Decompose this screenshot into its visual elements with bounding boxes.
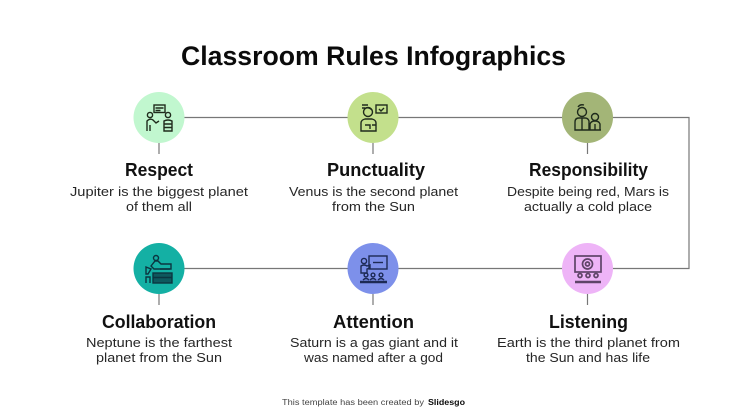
punctuality description: from the Sun	[332, 199, 415, 214]
listening circle	[562, 243, 613, 294]
step: listening	[497, 243, 680, 365]
responsibility description	[507, 184, 670, 214]
collaboration description: planet from the Sun	[96, 350, 222, 365]
step: respect	[70, 92, 248, 214]
listening description: Earth is the third planet from	[497, 335, 680, 350]
listening heading: Listening	[549, 312, 628, 332]
punctuality circle	[348, 92, 398, 143]
icon: students at desks	[146, 256, 172, 283]
respect heading: Respect	[125, 160, 193, 180]
responsibility description: Despite being red, Mars is	[507, 184, 670, 199]
icon: teacher with speech bubble	[361, 105, 387, 131]
responsibility circle	[562, 92, 613, 143]
respect description: of them all	[126, 199, 192, 214]
listening description: the Sun and has life	[526, 350, 650, 365]
attention circle	[348, 243, 398, 294]
icon: teacher at board	[360, 256, 387, 282]
footer credit	[282, 398, 465, 407]
punctuality description: Venus is the second planet	[289, 184, 458, 199]
step: collaboration	[86, 243, 232, 365]
footer credit: Slidesgo	[428, 398, 465, 407]
collaboration description	[86, 335, 232, 365]
attention heading: Attention	[333, 312, 414, 332]
step: attention	[290, 243, 458, 365]
connector line	[159, 118, 689, 305]
footer credit: This template has been created by	[282, 398, 424, 407]
collaboration circle	[134, 243, 184, 294]
step: responsibility	[507, 92, 670, 214]
responsibility heading: Responsibility	[529, 160, 648, 180]
collaboration heading: Collaboration	[102, 312, 216, 332]
attention description	[290, 335, 458, 365]
respect description: Jupiter is the biggest planet	[70, 184, 248, 199]
punctuality heading: Punctuality	[327, 160, 425, 180]
icon: audience watching screen	[575, 256, 601, 282]
step: punctuality	[289, 92, 458, 214]
listening description	[497, 335, 680, 365]
title: Classroom Rules Infographics	[181, 41, 566, 71]
collaboration description: Neptune is the farthest	[86, 335, 232, 350]
attention description: Saturn is a gas giant and it	[290, 335, 458, 350]
icon: adult and child	[575, 105, 601, 130]
respect description	[70, 184, 248, 214]
respect circle	[134, 92, 184, 143]
icon: two people talking	[147, 105, 172, 131]
attention description: was named after a god	[303, 350, 443, 365]
responsibility description: actually a cold place	[524, 199, 652, 214]
punctuality description	[289, 184, 458, 214]
